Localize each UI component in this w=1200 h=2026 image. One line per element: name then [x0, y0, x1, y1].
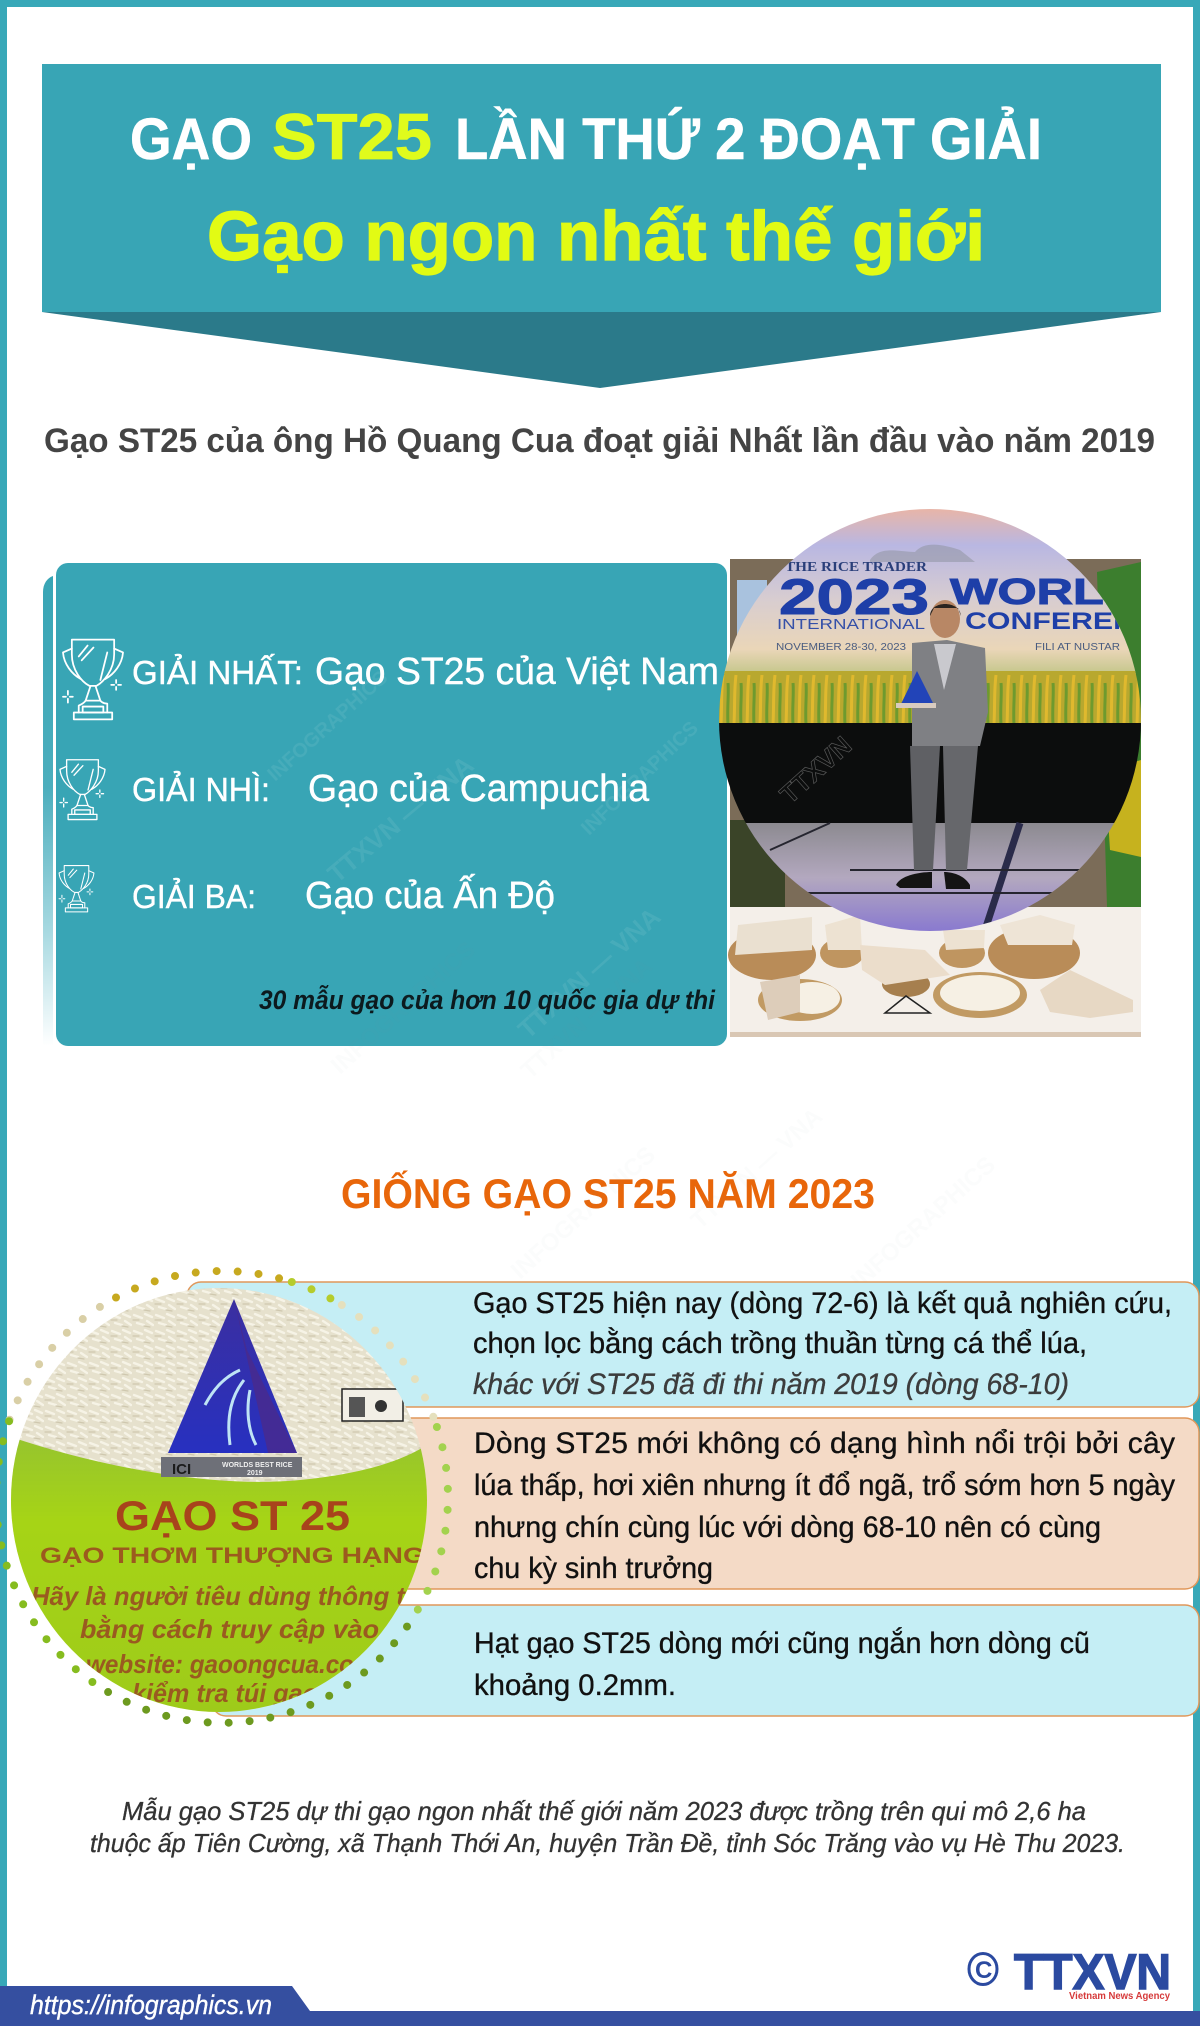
title line 2: Gạo ngon nhất thế giới — [207, 197, 985, 275]
rice trophy: ICI — [172, 1461, 191, 1478]
title line 1 — [130, 100, 1042, 173]
logo: TTXVN: C — [975, 1957, 992, 1984]
title line 1: LẦN THỨ 2 ĐOẠT GIẢI — [455, 107, 1042, 172]
callout: research result: khác với ST25 đã đi thi năm 2019 (dòng 68-10) — [473, 1368, 1069, 1401]
footer bar with url — [0, 1986, 1200, 2026]
circular crop — [719, 509, 1141, 933]
third prize: GIẢI BA: — [132, 878, 256, 915]
icon: first prize trophy — [63, 640, 123, 719]
rice trophy: WORLDS BEST RICE — [222, 1462, 293, 1469]
table with rice baskets — [728, 907, 1141, 1037]
bag text — [31, 1492, 425, 1708]
callout: plant form — [380, 1418, 1199, 1589]
icon: second prize trophy — [60, 760, 105, 820]
note: number of entries: 30 mẫu gạo của hơn 10 quốc gia dự thi — [259, 984, 715, 1015]
footnote — [90, 1796, 1125, 1858]
callout: research result: Gạo ST25 hiện nay (dòng 72-6) là kết quả nghiên cứu, — [473, 1287, 1172, 1320]
dotted ring around rice photo — [0, 1271, 448, 1723]
callout: research result — [187, 1282, 1199, 1407]
callout: grain length: khoảng 0.2mm. — [474, 1669, 676, 1702]
footnote: thuộc ấp Tiên Cường, xã Thạnh Thới An, huyện Trần Đề, tỉnh Sóc Trăng vào vụ Hè Thu 2023. — [90, 1828, 1125, 1858]
callout: grain length — [212, 1605, 1199, 1716]
photo: ST25 rice bag — [11, 1288, 427, 1712]
callout: grain length: Hạt gạo ST25 dòng mới cũng ngắn hơn dòng cũ — [474, 1627, 1090, 1660]
bag text: Hãy là người tiêu dùng thông t — [31, 1581, 406, 1611]
first prize: Gạo ST25 của Việt Nam — [315, 651, 719, 693]
circular crop: TTXVN — [774, 730, 857, 809]
watermarks on panel — [264, 667, 703, 1044]
rice trophy: 2019 — [247, 1470, 263, 1477]
logo: TTXVN: Vietnam News Agency — [1069, 1991, 1170, 2002]
callout: research result: chọn lọc bằng cách trồng thuần từng cá thể lúa, — [473, 1327, 1087, 1360]
watermarks on white background — [326, 936, 1001, 1294]
footer bar with url: https://infographics.vn — [30, 1990, 272, 2020]
second prize: GIẢI NHÌ: — [132, 771, 270, 808]
watermarks on white background: TTXVN — VNA — [686, 1103, 828, 1234]
bag text: GẠO ST 25 — [115, 1492, 350, 1539]
watermarks on panel: TTXVN — VNA — [512, 901, 666, 1044]
rice trophy — [161, 1299, 302, 1478]
bag text: bằng cách truy cập vào — [80, 1614, 379, 1644]
subtitle: Gạo ST25 của ông Hồ Quang Cua đoạt giải Nhất lần đầu vào năm 2019 — [44, 422, 1155, 460]
watermarks on white background: INFOGRAPHICS — [506, 1141, 661, 1284]
callout: plant form: nhưng chín cùng lúc với dòng 68-10 nên có cùng — [474, 1511, 1101, 1544]
photo background — [730, 559, 1141, 907]
watermarks on white background: TTXVN — VNA — [516, 953, 658, 1084]
watermarks on panel: INFOGRAPHICS — [264, 667, 392, 786]
bag text: kiểm tra túi gạo — [132, 1678, 318, 1708]
conference backdrop text: INTERNATIONAL — [777, 616, 925, 633]
conference backdrop text: NOVEMBER 28-30, 2023 — [776, 642, 907, 653]
watermarks on white background: INFOGRAPHICS — [846, 1151, 1001, 1294]
conference backdrop text: FILI AT NUSTAR — [1035, 642, 1120, 653]
conference backdrop text: 2023 — [779, 569, 929, 625]
panel: awards — [43, 563, 727, 1046]
callout: plant form: Dòng ST25 mới không có dạng hình nổi trội bởi cây — [474, 1427, 1175, 1460]
third prize — [132, 873, 555, 917]
second prize — [132, 768, 650, 810]
third prize: Gạo của Ấn Độ — [305, 873, 555, 917]
watermarks on panel: TTXVN — VNA — [322, 749, 479, 889]
first prize: GIẢI NHẤT: — [132, 654, 303, 691]
title banner — [42, 64, 1161, 388]
man holding trophy — [896, 600, 988, 889]
icon: third prize trophy — [59, 866, 94, 912]
logo: TTXVN: TTXVN — [1014, 1944, 1171, 2000]
bag text: GẠO THƠM THƯỢNG HẠNG — [40, 1543, 425, 1568]
conference backdrop text: WORLD — [950, 571, 1140, 612]
footnote: Mẫu gạo ST25 dự thi gạo ngon nhất thế giới năm 2023 được trồng trên qui mô 2,6 ha — [122, 1796, 1086, 1826]
first prize — [132, 651, 719, 693]
callout: plant form: chu kỳ sinh trưởng — [474, 1552, 713, 1585]
photo: award ceremony — [719, 509, 1141, 1037]
title line 1: GẠO — [130, 107, 252, 172]
second prize: Gạo của Campuchia — [308, 768, 650, 810]
title line 1: ST25 — [272, 100, 432, 173]
watermarks on panel: INFOGRAPHICS — [577, 717, 703, 840]
bag text: website: gaoongcua.co — [86, 1649, 354, 1679]
callout: plant form: lúa thấp, hơi xiên nhưng ít đổ ngã, trổ sớm hơn 5 ngày — [474, 1469, 1175, 1502]
conference backdrop text: THE RICE TRADER — [785, 560, 928, 575]
heading: ST25 2023: GIỐNG GẠO ST25 NĂM 2023 — [341, 1169, 875, 1217]
conference backdrop text — [776, 560, 1140, 653]
watermarks on white background: INFOGRAPHICS — [326, 936, 481, 1079]
conference backdrop text: CONFEREN — [965, 608, 1135, 635]
QR card — [342, 1389, 403, 1421]
